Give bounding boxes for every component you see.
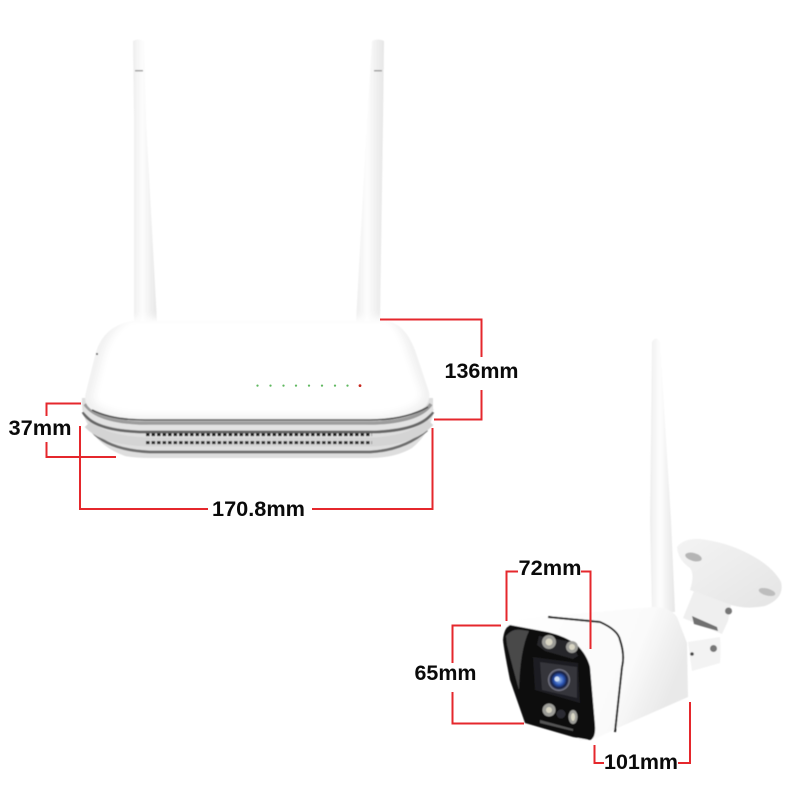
upper LED pair: [537, 635, 578, 659]
dimension: 37mm: [8, 404, 116, 457]
vent holes row 1: [146, 433, 372, 436]
camera front face: [503, 625, 595, 740]
status LEDs: [256, 384, 361, 387]
dimension: 170.8mm: [80, 426, 432, 521]
icon: right antenna: [356, 40, 384, 322]
router: [82, 40, 433, 458]
mount arm: [683, 591, 732, 671]
router top plate shadow edge: [85, 321, 429, 420]
icon: left antenna: [133, 40, 157, 322]
label: 136mm: 136mm: [444, 360, 518, 383]
vent holes row 2: [146, 441, 372, 444]
label: 65mm: 65mm: [414, 662, 476, 685]
label: 101mm: 101mm: [604, 751, 678, 774]
camera: [503, 338, 782, 741]
front hood shading: [506, 630, 529, 690]
camera body: [507, 607, 688, 741]
lower LED pair: [540, 704, 578, 731]
label: 170.8mm: 170.8mm: [212, 498, 305, 521]
dimension: 65mm: [414, 626, 524, 724]
lens housing: [533, 657, 580, 703]
dimension: 72mm: [506, 557, 590, 649]
grey casing bands: [83, 404, 433, 452]
label: 37mm: 37mm: [8, 417, 72, 440]
dimension: 136mm: [380, 320, 518, 420]
icon: camera antenna: [650, 338, 675, 612]
label: 72mm: 72mm: [518, 557, 582, 580]
router top plate: [93, 318, 422, 416]
dimension: 101mm: [594, 702, 690, 774]
wall mount base: [677, 539, 782, 608]
casing marks: [96, 353, 98, 355]
body seam: [548, 617, 623, 732]
router lower casing: [82, 398, 433, 458]
